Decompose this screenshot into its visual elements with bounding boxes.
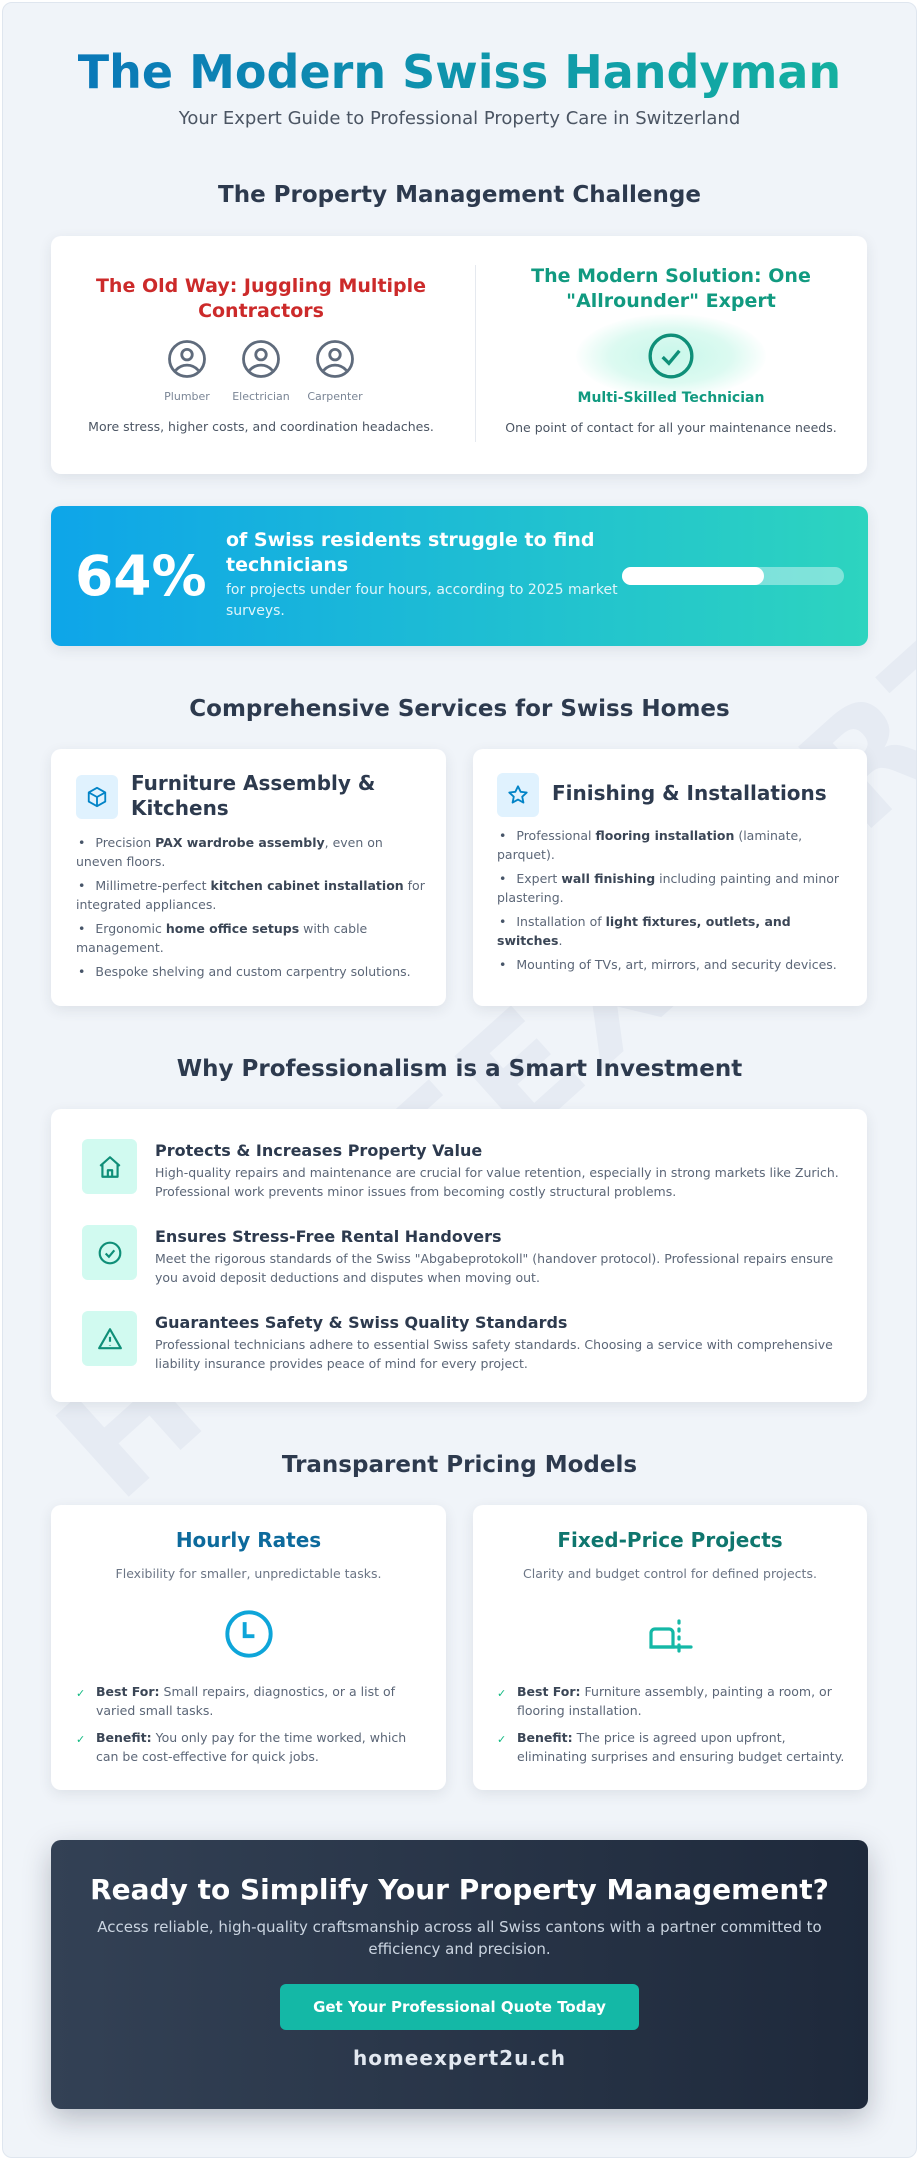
cta button: Get Your Professional Quote Today	[313, 1998, 606, 2016]
item: safety	[82, 1311, 833, 1371]
icons: contractors: Plumber	[164, 390, 210, 403]
furniture heading: Kitchens	[131, 796, 229, 820]
furniture list: Ergonomic home office setups with cable management.	[76, 921, 367, 955]
stat text	[226, 529, 618, 619]
modern caption: One point of contact for all your maintenance needs.	[505, 420, 837, 435]
modern heading: The Modern Solution: One	[531, 265, 811, 287]
item: rental handovers: Meet the rigorous standards of the Swiss "Abgabeprotokoll" (handover protocol). Professional repairs ensure you avoid deposit deductions and disputes when moving out.	[155, 1251, 833, 1285]
icon: ruler box	[649, 1619, 693, 1653]
panel: furniture	[51, 749, 446, 1006]
subtitle: Your Expert Guide to Professional Property Care in Switzerland	[179, 108, 740, 129]
furniture heading	[131, 771, 375, 820]
icon: clock	[225, 1610, 273, 1658]
hourly list	[78, 1684, 406, 1764]
stat text: of Swiss residents struggle to find technicians	[226, 529, 594, 576]
heading: why: Why Professionalism is a Smart Investment	[177, 1056, 742, 1082]
finishing heading: Finishing & Installations	[552, 781, 827, 805]
icon: house	[82, 1139, 137, 1194]
stat number: 64%	[75, 544, 207, 608]
panel: why	[51, 1109, 867, 1402]
stat text: for projects under four hours, according to 2025 market surveys.	[226, 582, 618, 619]
panel: hourly	[51, 1505, 446, 1790]
progress bar	[622, 567, 844, 585]
furniture list: Millimetre-perfect kitchen cabinet installation for integrated appliances.	[76, 878, 425, 912]
cta heading: Ready to Simplify Your Property Management?	[90, 1873, 829, 1906]
old way caption: More stress, higher costs, and coordination headaches.	[88, 419, 434, 434]
hourly list: Benefit: You only pay for the time worked, which can be cost-effective for quick jobs.	[96, 1730, 406, 1764]
icon: check glow	[576, 314, 766, 398]
item: rental handovers	[82, 1225, 833, 1285]
panel: finishing	[473, 749, 867, 1006]
old way	[88, 275, 434, 434]
icons: contractors	[164, 340, 363, 403]
finishing list: Professional flooring installation (laminate, parquet).	[497, 828, 802, 862]
icons: contractors: Carpenter	[307, 390, 363, 403]
fixed list	[498, 1684, 844, 1764]
title: The Modern Swiss Handyman	[78, 45, 841, 99]
modern heading: "Allrounder" Expert	[566, 290, 776, 312]
item: rental handovers: Ensures Stress-Free Rental Handovers	[155, 1227, 502, 1246]
hourly subtitle: Flexibility for smaller, unpredictable tasks.	[116, 1566, 381, 1581]
item: safety: Guarantees Safety & Swiss Quality Standards	[155, 1313, 567, 1332]
heading: pricing: Transparent Pricing Models	[282, 1452, 637, 1478]
item: property value: High-quality repairs and maintenance are crucial for value retention, especially in strong markets like Zurich. Professional work prevents minor issues from becoming costly structural problems.	[155, 1165, 839, 1199]
item: property value	[82, 1139, 839, 1199]
stat banner	[51, 506, 868, 646]
furniture list	[76, 835, 425, 979]
old way heading: The Old Way: Juggling Multiple	[96, 275, 426, 297]
fixed subtitle: Clarity and budget control for defined projects.	[523, 1566, 817, 1581]
cta button	[280, 1984, 639, 2030]
furniture list: Bespoke shelving and custom carpentry solutions.	[95, 964, 411, 979]
fixed title: Fixed-Price Projects	[557, 1528, 783, 1552]
heading: services: Comprehensive Services for Swiss Homes	[189, 696, 730, 722]
technician label: Multi-Skilled Technician	[578, 390, 764, 406]
finishing list: Expert wall finishing including painting and minor plastering.	[497, 871, 839, 905]
finishing list: Mounting of TVs, art, mirrors, and security devices.	[516, 957, 837, 972]
item: property value: Protects & Increases Property Value	[155, 1141, 482, 1160]
fixed list: Best For: Furniture assembly, painting a room, or flooring installation.	[517, 1684, 832, 1718]
icon: star	[497, 773, 539, 817]
fixed list: Benefit: The price is agreed upon upfront, eliminating surprises and ensuring budget certainty.	[517, 1730, 844, 1764]
hourly title: Hourly Rates	[176, 1528, 321, 1552]
modern solution	[505, 265, 837, 435]
cta panel	[51, 1840, 868, 2109]
cta text: Access reliable, high-quality craftsmanship across all Swiss cantons with a partner committed to efficiency and precision.	[97, 1918, 822, 1958]
panel: fixed	[473, 1505, 867, 1790]
icon: cube	[76, 775, 118, 819]
item: safety: Professional technicians adhere to essential Swiss safety standards. Choosing a service with comprehensive liability insurance provides peace of mind for every project.	[155, 1337, 833, 1371]
heading: challenge: The Property Management Challenge	[218, 182, 701, 208]
panel: challenge	[51, 236, 867, 474]
icon: check	[82, 1225, 137, 1280]
domain: homeexpert2u.ch	[353, 2046, 566, 2070]
hourly list: Best For: Small repairs, diagnostics, or a list of varied small tasks.	[96, 1684, 395, 1718]
furniture list: Precision PAX wardrobe assembly, even on uneven floors.	[76, 835, 383, 869]
finishing list: Installation of light fixtures, outlets, and switches.	[497, 914, 791, 948]
furniture heading: Furniture Assembly &	[131, 771, 375, 795]
icons: contractors: Electrician	[232, 390, 290, 403]
finishing list	[497, 828, 839, 972]
modern heading	[531, 265, 811, 312]
old way heading: Contractors	[198, 300, 324, 322]
icon: warning	[82, 1311, 137, 1366]
old way heading	[96, 275, 426, 322]
